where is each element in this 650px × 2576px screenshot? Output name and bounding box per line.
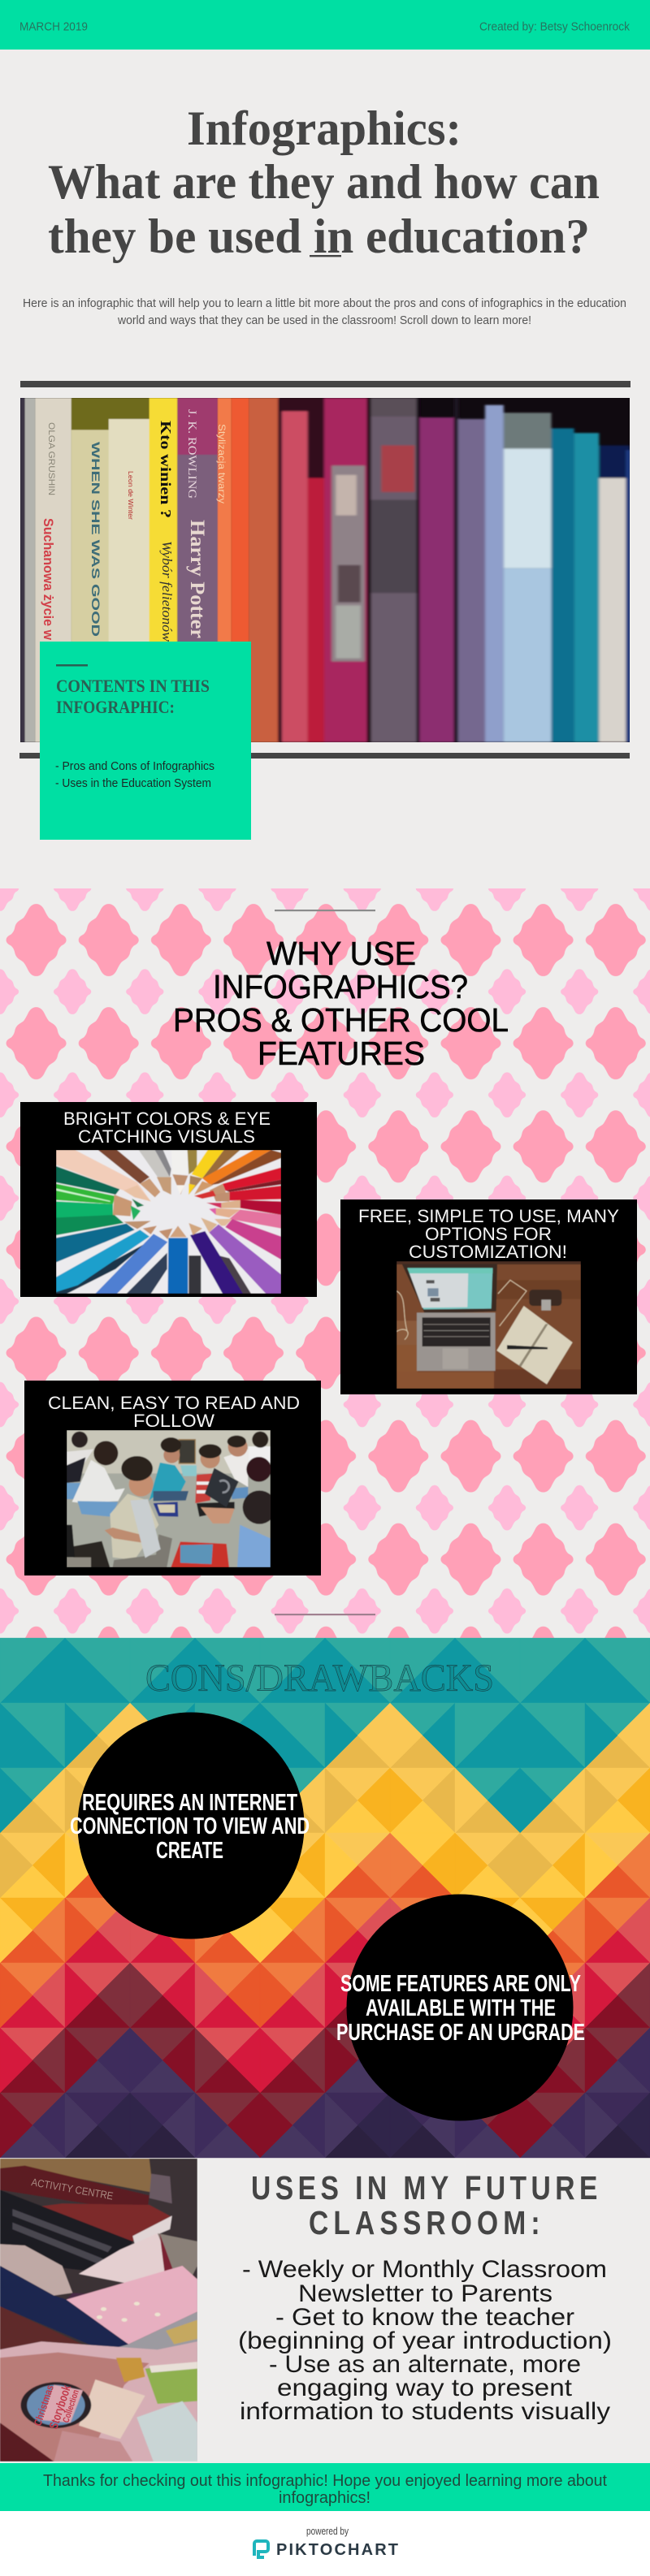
header bar xyxy=(0,0,650,50)
footer banner: infographics! xyxy=(279,2489,370,2507)
contents heading: CONTENTS IN THIS xyxy=(56,676,210,696)
panel: uses in my future classroom xyxy=(238,2169,612,2425)
uses list: information to students visually xyxy=(240,2398,610,2425)
card: bright colors xyxy=(20,1102,317,1297)
bottom rule xyxy=(20,753,630,759)
uses list xyxy=(238,2256,612,2425)
heading: why use infographics: INFOGRAPHICS? xyxy=(213,968,468,1005)
contents list: - Pros and Cons of Infographics xyxy=(55,760,214,773)
book cover text: ACTIVITY CENTRE xyxy=(30,2176,115,2202)
card caption: FOLLOW xyxy=(133,1411,214,1431)
photo: colored pencils xyxy=(56,1150,281,1294)
card caption: FREE, SIMPLE TO USE, MANY xyxy=(358,1206,619,1226)
powered by credit: powered by xyxy=(306,2526,349,2537)
contents list: - Uses in the Education System xyxy=(55,777,211,790)
heading: cons and drawbacks: CONS/DRAWBACKS xyxy=(145,1657,494,1700)
card caption xyxy=(63,1109,271,1147)
uses list: - Use as an alternate, more xyxy=(269,2351,581,2378)
contents heading xyxy=(56,676,210,717)
intro text xyxy=(23,297,626,327)
card caption: CATCHING VISUALS xyxy=(78,1126,255,1147)
heading: why use infographics: WHY USE xyxy=(266,935,416,972)
book cover text: Storybook xyxy=(47,2383,74,2431)
spine titles: Suchanowa życie w xyxy=(41,518,56,641)
heading: uses: USES IN MY FUTURE xyxy=(251,2169,597,2206)
book cover text xyxy=(30,2176,115,2431)
divider xyxy=(275,910,375,911)
title: they be used in education? xyxy=(48,210,590,263)
date: MARCH 2019 xyxy=(20,19,88,34)
uses list: engaging way to present xyxy=(277,2375,573,2401)
uses list: (beginning of year introduction) xyxy=(238,2327,612,2354)
title xyxy=(48,102,600,263)
spine titles xyxy=(41,409,228,642)
right blurred spines xyxy=(279,398,631,742)
card caption xyxy=(48,1393,300,1431)
heading: uses xyxy=(251,2169,597,2241)
piktochart wordmark: PIKTOCHART xyxy=(276,2541,398,2559)
top rule xyxy=(20,381,630,387)
callout: paid upgrade: AVAILABLE WITH THE xyxy=(366,1995,556,2021)
card caption: BRIGHT COLORS & EYE xyxy=(63,1109,271,1129)
callout: internet required: CONNECTION TO VIEW AND xyxy=(70,1813,310,1839)
spine titles: Wybór felietonów xyxy=(159,541,175,642)
photo: children in a classroom xyxy=(67,1430,276,1567)
card: free and simple xyxy=(340,1199,637,1394)
intro text: world and ways that they can be used in the classroom! Scroll down to learn more! xyxy=(117,314,531,327)
callout: paid upgrade xyxy=(336,1894,585,2121)
heading: uses: CLASSROOM: xyxy=(309,2204,540,2241)
photo: laptop and notebook xyxy=(396,1261,581,1389)
heading: why use infographics: FEATURES xyxy=(258,1035,425,1072)
heading: why use infographics: PROS & OTHER COOL xyxy=(173,1001,509,1039)
card caption: CUSTOMIZATION! xyxy=(409,1242,567,1262)
heading: why use infographics xyxy=(173,935,509,1072)
book cover text: Christmas xyxy=(32,2384,56,2427)
card caption: CLEAN, EASY TO READ AND xyxy=(48,1393,300,1413)
footer banner xyxy=(0,2463,650,2511)
white credit strip xyxy=(0,2511,650,2576)
card caption: OPTIONS FOR xyxy=(425,1224,552,1244)
photo: bookshelf xyxy=(20,398,631,742)
author credit: Created by: Betsy Schoenrock xyxy=(479,19,630,34)
spine titles: Harry Potter xyxy=(186,520,208,638)
contents heading: INFOGRAPHIC: xyxy=(56,697,175,717)
spine titles: J. K. ROWLING xyxy=(185,409,198,499)
card: clean and easy xyxy=(24,1381,321,1575)
contents list xyxy=(55,760,214,790)
spine titles: Kto winien ? xyxy=(158,421,174,518)
callout: internet required: CREATE xyxy=(156,1838,223,1864)
uses list: - Get to know the teacher xyxy=(275,2304,574,2331)
panel: contents xyxy=(40,642,251,840)
icon: piktochart logo xyxy=(254,2541,268,2557)
panel: pros section background xyxy=(0,888,650,1638)
left sharp spines xyxy=(20,398,280,742)
photo: pile of books xyxy=(0,2159,197,2461)
uses list: Newsletter to Parents xyxy=(298,2280,552,2307)
uses list: - Weekly or Monthly Classroom xyxy=(242,2256,607,2283)
panel: cons background triangles xyxy=(0,1638,650,2158)
card caption xyxy=(358,1206,619,1262)
title: What are they and how can xyxy=(48,155,600,209)
callout: internet required xyxy=(70,1712,310,1939)
footer banner: Thanks for checking out this infographic! Hope you enjoyed learning more about xyxy=(43,2472,607,2490)
spine titles: WHEN SHE WAS GOOD xyxy=(89,442,102,637)
divider xyxy=(275,1614,375,1615)
book cover text: Collection xyxy=(61,2388,81,2424)
title: Infographics: xyxy=(187,102,462,155)
spine titles: Stylizacja twarzy xyxy=(216,424,228,504)
spine titles: Leon de Winter xyxy=(127,471,134,520)
spine titles: OLGA GRUSHIN xyxy=(46,422,56,495)
intro text: Here is an infographic that will help you to learn a little bit more about the pros and cons of infographics in the education xyxy=(23,297,626,310)
callout: internet required: REQUIRES AN INTERNET xyxy=(82,1790,297,1816)
